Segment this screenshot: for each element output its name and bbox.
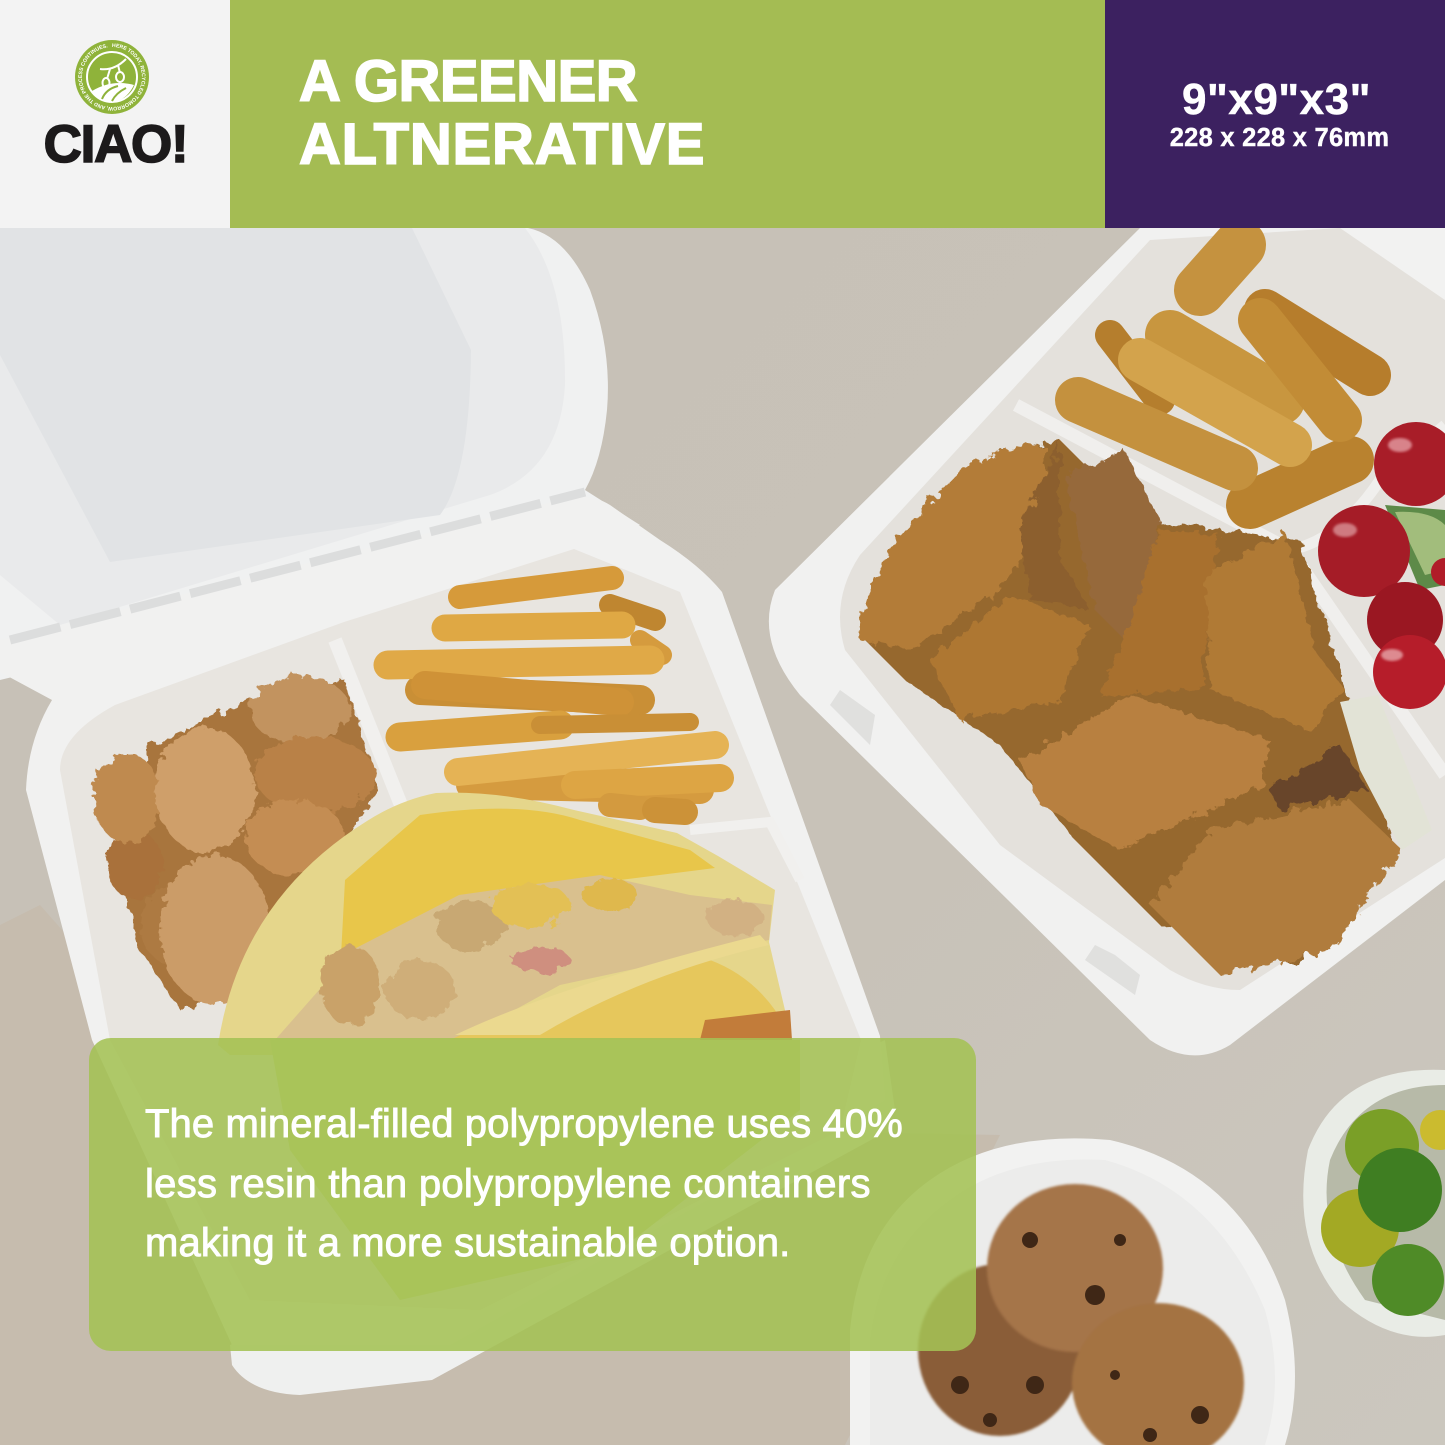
- compartment divider: [335, 640, 405, 815]
- callout text: less resin than polypropylene containers: [145, 1162, 871, 1206]
- callout: [89, 1038, 976, 1351]
- right container: [769, 228, 1445, 1055]
- logo wordmark: CIAO!: [44, 115, 187, 174]
- body: [0, 497, 885, 1345]
- logo panel: [0, 0, 230, 228]
- title: A GREENER: [299, 49, 637, 114]
- header bar: [0, 0, 1445, 228]
- left fries: [388, 578, 720, 812]
- under-callout lettuce: [270, 1040, 800, 1300]
- title panel: [230, 0, 1105, 228]
- title: ALTNERATIVE: [299, 112, 705, 177]
- base shadow edge and lower rim: [230, 1040, 895, 1395]
- callout text: [145, 1102, 903, 1265]
- lid hinge ribs: [10, 492, 585, 640]
- left chicken: [94, 676, 378, 1010]
- bowl of limes: [1303, 1070, 1445, 1337]
- napkin: [0, 905, 1000, 1445]
- left container: [0, 228, 895, 1395]
- right fried chicken: [860, 440, 1402, 975]
- plate with cookies: [850, 1138, 1295, 1445]
- callout text: The mineral-filled polypropylene uses 40%: [145, 1102, 903, 1146]
- dimensions imperial: 9"x9"x3": [1182, 75, 1371, 124]
- dimensions panel: [1105, 0, 1445, 228]
- taco: [218, 793, 792, 1055]
- lid: [0, 228, 640, 680]
- dimensions metric: 228 x 228 x 76mm: [1170, 124, 1389, 152]
- right salad: [1318, 422, 1445, 850]
- callout text: making it a more sustainable option.: [145, 1221, 790, 1265]
- body interior: [60, 549, 861, 1310]
- title: [299, 49, 705, 177]
- logo badge: HERE TODAY, RECYCLED TOMORROW, AND THE PROCESS CONTINUES.: [78, 43, 146, 111]
- right wedge fries: [1078, 245, 1370, 505]
